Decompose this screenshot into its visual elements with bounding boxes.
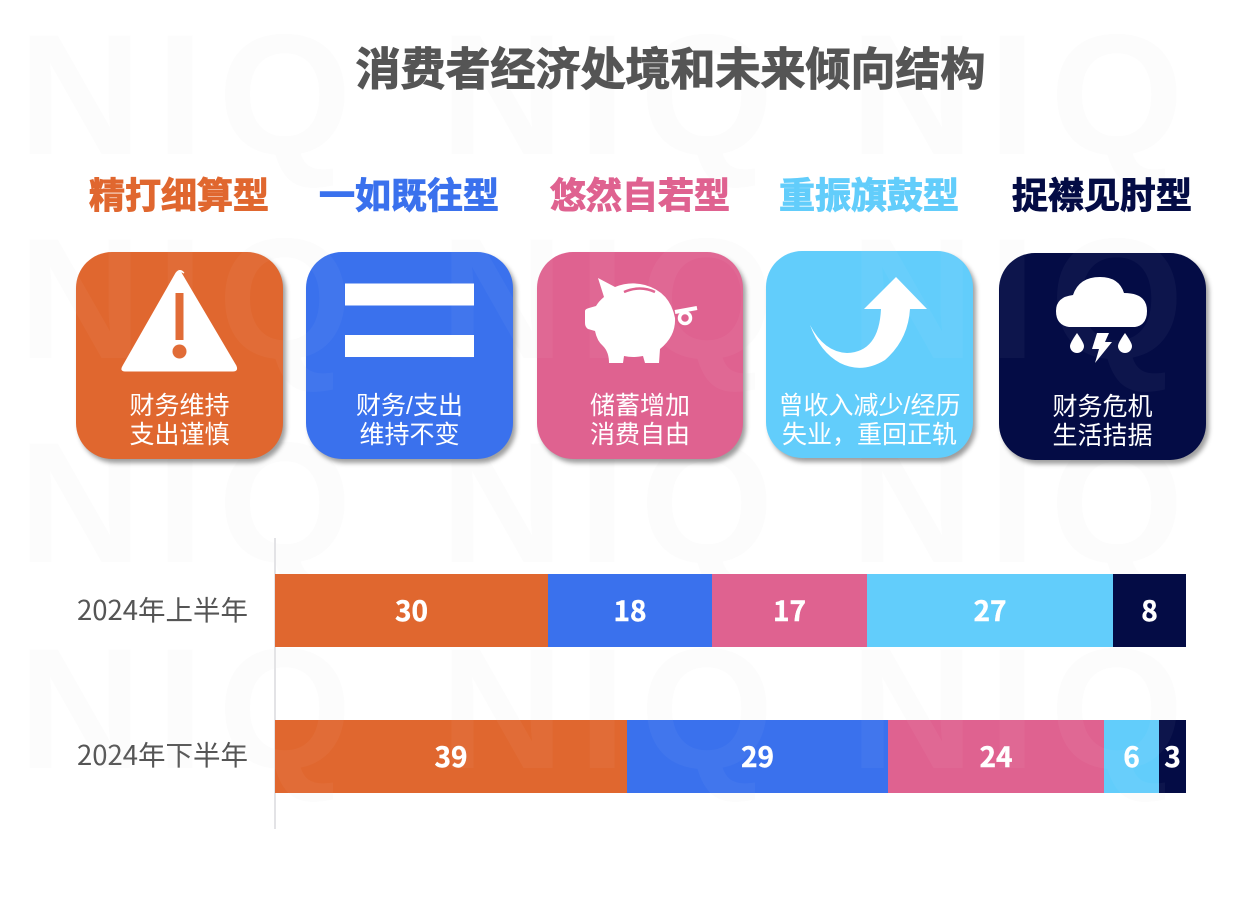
icon: warning triangle <box>121 270 238 372</box>
segment 30: 30 <box>395 590 428 630</box>
segment 29 <box>627 720 888 792</box>
segment 8: 8 <box>1141 590 1158 630</box>
panel: 精打细算型 card <box>76 252 283 459</box>
icon: storm cloud <box>1056 277 1147 363</box>
icon: piggy bank <box>585 278 698 363</box>
segment 18: 18 <box>613 590 647 630</box>
panel: 悠然自若型 card <box>537 252 743 459</box>
icon: rising arrow <box>810 277 927 368</box>
card text: 曾收入减少/经历 <box>779 392 960 420</box>
card text: 财务维持 <box>129 392 230 420</box>
row label: 2024年上半年: 2024年上半年 <box>77 588 248 628</box>
segment 6: 6 <box>1123 736 1140 776</box>
card text: 维持不变 <box>359 421 460 449</box>
card text: 失业，重回正轨 <box>782 421 957 449</box>
segment 29: 29 <box>741 736 774 776</box>
watermark overlay on coloured elements: NIQ <box>440 203 788 395</box>
watermark overlay on coloured elements: NIQ <box>440 613 788 805</box>
card text: 财务/支出 <box>356 392 463 420</box>
watermark overlay on coloured elements: NIQ <box>850 203 1198 395</box>
background watermark: NIQ <box>850 203 1198 395</box>
segment 39: 39 <box>434 736 468 776</box>
segment 24: 24 <box>979 736 1013 776</box>
segment 3: 3 <box>1164 736 1181 776</box>
watermark overlay on coloured elements: NIQ <box>18 613 366 805</box>
background watermark: NIQ <box>18 0 366 191</box>
segment 6 <box>1104 720 1159 792</box>
heading: 一如既往型: 一如既往型 <box>319 175 499 216</box>
background watermark: NIQ <box>850 0 1198 191</box>
background watermark: NIQ <box>440 0 788 191</box>
panel: 捉襟见肘型 card <box>999 253 1206 460</box>
chart axis <box>274 538 276 829</box>
background watermark: NIQ <box>18 407 366 599</box>
segment 27: 27 <box>973 590 1007 630</box>
background watermark: NIQ <box>440 203 788 395</box>
segment 18 <box>548 574 712 646</box>
card text: 消费自由 <box>590 421 690 449</box>
panel: 重振旗鼓型 card <box>766 251 973 458</box>
card text: 生活拮据 <box>1052 422 1152 450</box>
watermark overlay on coloured elements: NIQ <box>18 203 366 395</box>
row label: 2024年下半年: 2024年下半年 <box>77 733 248 773</box>
segment 17: 17 <box>773 590 806 630</box>
title: 消费者经济处境和未来倾向结构 <box>355 44 986 95</box>
card text: 支出谨慎 <box>129 421 230 449</box>
background watermark: NIQ <box>18 203 366 395</box>
background watermark: NIQ <box>18 613 366 805</box>
segment 39 <box>275 720 627 792</box>
card text <box>1052 393 1152 450</box>
stacked bar: 2024年上半年 <box>275 574 1186 647</box>
card text <box>590 392 690 449</box>
heading: 重振旗鼓型: 重振旗鼓型 <box>779 175 959 216</box>
background watermark: NIQ <box>440 613 788 805</box>
segment 27 <box>867 574 1113 646</box>
card text <box>129 392 230 449</box>
watermark overlay on coloured elements: NIQ <box>850 613 1198 805</box>
icon: equals sign <box>345 284 474 357</box>
background watermark: NIQ <box>850 407 1198 599</box>
segment 8 <box>1113 574 1186 646</box>
segment 30 <box>275 574 548 646</box>
card text <box>356 392 463 449</box>
segment 3 <box>1159 720 1186 792</box>
card text: 储蓄增加 <box>590 392 690 420</box>
heading: 捉襟见肘型: 捉襟见肘型 <box>1012 175 1192 216</box>
heading: 精打细算型: 精打细算型 <box>89 175 269 216</box>
panel: 一如既往型 card <box>306 252 513 459</box>
card text: 财务危机 <box>1052 393 1152 421</box>
heading: 悠然自若型: 悠然自若型 <box>550 175 730 216</box>
stacked bar: 2024年下半年 <box>275 720 1186 793</box>
background watermark: NIQ <box>440 407 788 599</box>
segment 17 <box>712 574 867 646</box>
segment 24 <box>888 720 1104 792</box>
background watermark: NIQ <box>850 613 1198 805</box>
card text <box>779 392 960 449</box>
